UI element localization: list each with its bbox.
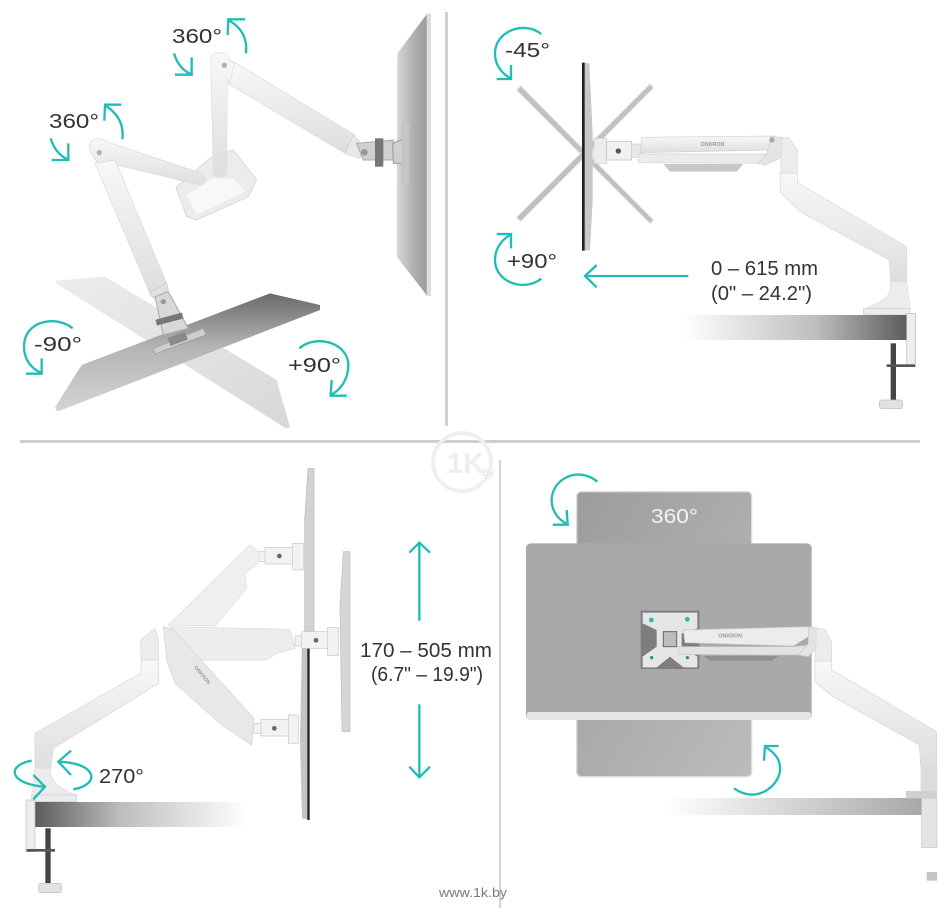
arrow: height down — [409, 704, 430, 777]
arms: three positions — [163, 545, 295, 745]
mount bracket bottom — [153, 292, 206, 354]
label: -90: -90° — [34, 333, 82, 356]
monitor: side view right — [397, 13, 431, 296]
panel: swivel and tilt, top left — [24, 13, 431, 428]
label: extension range — [711, 257, 818, 305]
logo text: ONKRON — [701, 142, 724, 148]
watermark: 1K logo — [433, 433, 495, 491]
monitor: middle — [340, 552, 350, 732]
desk clamp — [26, 795, 77, 893]
panel: rotation, bottom right — [526, 475, 937, 881]
arrow: extension — [585, 265, 688, 287]
monitors: horizontal pair — [55, 277, 320, 428]
panel: height adjustment, bottom left — [15, 468, 492, 893]
arm base — [176, 150, 257, 220]
label: 270: 270° — [99, 765, 144, 788]
label: height range: (6.7" – 19.9") — [371, 663, 483, 686]
arrow: 270 rotation — [15, 751, 91, 799]
brackets — [253, 543, 338, 743]
arm with logo — [678, 627, 818, 661]
watermark: 1K logo: .by — [480, 468, 495, 479]
label: extension range: (0" – 24.2") — [711, 282, 812, 305]
arm segments — [89, 52, 364, 298]
label: 360 lower: 360° — [49, 110, 99, 133]
desk edge — [35, 802, 247, 827]
label: +90: +90° — [507, 250, 557, 273]
arrow: rotation top — [552, 475, 597, 525]
monitor: upright — [582, 63, 593, 251]
monitor: landscape back — [526, 543, 812, 720]
arrow: +90 — [299, 341, 348, 396]
arrow: 360 lower — [51, 105, 123, 160]
arm pillar and elbow — [32, 628, 159, 795]
monitors: tilt cross — [517, 84, 653, 223]
arm with logo: ONKRON — [718, 633, 742, 639]
label: 360 top: 360° — [172, 25, 222, 48]
arm with logo — [594, 136, 783, 172]
arrow: -45 — [495, 28, 541, 79]
arm pillar and elbow — [780, 137, 910, 308]
monitor: lower — [300, 639, 310, 820]
desk edge — [683, 315, 907, 340]
arrow: +90 — [495, 234, 541, 285]
VESA plate — [641, 611, 699, 669]
desk edge — [667, 798, 922, 815]
label: 360: 360° — [651, 505, 698, 528]
monitor: portrait back — [577, 492, 752, 777]
label: extension range: 0 – 615 mm — [711, 257, 818, 280]
arm pillar and elbow — [815, 628, 937, 792]
mount bracket right — [357, 124, 409, 184]
monitor: upper — [305, 468, 314, 633]
desk clamp — [863, 308, 916, 409]
arrow: 360 top — [174, 19, 246, 75]
panel: tilt and extension, top right — [495, 28, 916, 409]
desk clamp — [906, 791, 937, 881]
arrow: height up — [409, 543, 430, 621]
watermark: 1K logo: 1K — [447, 448, 484, 480]
logo text: ONKRON — [192, 665, 212, 686]
label: -45: -45° — [505, 39, 550, 62]
label: +90: +90° — [288, 354, 341, 377]
arrow: rotation bottom — [734, 746, 780, 795]
label: height range: 170 – 505 mm — [360, 639, 492, 662]
arrow: -90 — [24, 321, 73, 374]
label: height range — [360, 639, 492, 686]
website credit: www.1k.by — [438, 885, 508, 900]
